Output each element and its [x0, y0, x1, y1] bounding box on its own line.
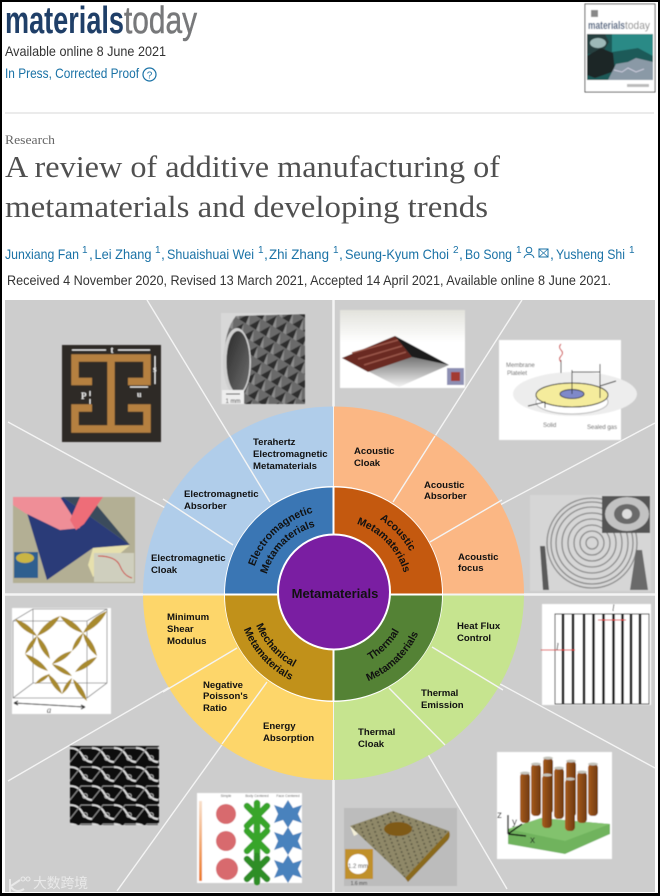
image: electromagnetic cloak	[13, 497, 135, 583]
image: split ring resonator: s	[153, 364, 157, 374]
authors: 1	[82, 245, 88, 256]
image: lattice unit cell: a	[47, 705, 52, 715]
labels: thermal branches: Cloak	[358, 739, 385, 750]
journal cover thumbnail: today	[625, 20, 650, 32]
authors: ,	[550, 246, 554, 262]
labels: mechanical branches: Energy	[263, 721, 296, 732]
image: split ring resonator	[62, 345, 161, 442]
image: black auxetic lattice	[70, 746, 159, 825]
ring label: electromagnetic: Metamaterials	[260, 522, 314, 574]
authors: ,	[339, 246, 343, 262]
image: coloured unit cell grid: Simple	[221, 794, 231, 798]
authors: 1	[516, 245, 522, 256]
image: thermal cloak plate: 1.2 mm	[348, 864, 368, 870]
authors: Seung-Kyum Choi	[345, 246, 449, 262]
middle quadrant: acoustic	[334, 488, 442, 594]
image: thermal cloak plate: 1.6 mm	[351, 881, 367, 887]
authors: Zhi Zhang	[269, 246, 329, 262]
center label: Metamaterials	[292, 586, 378, 601]
labels: electromagnetic branches: Electromagnetic	[151, 553, 226, 564]
image: thermal cloak plate	[344, 808, 457, 887]
image: split ring resonator: t	[110, 345, 114, 355]
article history: Received 4 November 2020, Revised 13 March 2021, Accepted 14 April 2021, Available online 8 June 2021.	[7, 272, 611, 288]
ring label: electromagnetic: Electromagnetic	[248, 507, 312, 566]
labels: mechanical branches: Minimum	[167, 612, 209, 623]
image: copper pillars: y	[512, 817, 517, 828]
authors: ,	[161, 246, 165, 262]
publication date: Available online 8 June 2021	[5, 43, 166, 59]
authors: ,	[459, 246, 463, 262]
authors	[5, 245, 635, 262]
image: spiked cylinder	[221, 313, 305, 405]
spoke lines	[5, 300, 655, 892]
ring label: mechanical: Metamaterials	[244, 626, 292, 680]
labels: mechanical branches: Ratio	[203, 703, 227, 714]
quadrant: mechanical outer	[143, 596, 333, 780]
labels: mechanical branches: Modulus	[167, 636, 206, 647]
image: membrane absorber	[499, 340, 637, 440]
labels: acoustic branches	[354, 446, 499, 574]
labels: thermal branches: Emission	[421, 700, 464, 711]
labels: acoustic branches: Acoustic	[458, 552, 499, 563]
image: coloured unit cell grid: Face Centered	[276, 794, 300, 798]
in press status: In Press, Corrected Proof	[5, 65, 139, 81]
authors: ,	[89, 246, 93, 262]
labels: electromagnetic branches	[151, 437, 328, 576]
image: membrane absorber: Membrane	[506, 363, 535, 369]
image: stripe grating: l	[612, 603, 615, 613]
authors: 1	[155, 245, 161, 256]
authors: Bo Song	[465, 246, 512, 262]
authors: Junxiang Fan	[5, 246, 79, 262]
authors: Yusheng Shi	[556, 246, 625, 262]
ring label: acoustic: Metamaterials	[357, 517, 409, 572]
middle quadrant: thermal	[334, 596, 442, 700]
journal logo: materials	[5, 0, 124, 42]
outer ring dividers	[163, 436, 503, 745]
watermark	[10, 875, 88, 892]
image: stripe grating: l	[556, 642, 559, 653]
labels: thermal branches	[358, 621, 501, 750]
labels: acoustic branches: Cloak	[354, 458, 381, 469]
image: split ring resonator: P	[81, 391, 87, 401]
central circle	[278, 534, 390, 650]
labels: mechanical branches	[167, 612, 314, 744]
image: membrane absorber: Sealed gas	[587, 425, 617, 431]
image: coloured unit cell grid: Body Centered	[245, 794, 269, 798]
labels: thermal branches: Thermal	[421, 688, 458, 699]
middle quadrant: electromagnetic	[225, 488, 332, 594]
labels: electromagnetic branches: Cloak	[151, 565, 178, 576]
diagram panel background	[5, 300, 655, 892]
ring label: acoustic: Acoustic	[380, 514, 414, 550]
image: copper pillars: z	[497, 810, 502, 821]
journal cover thumbnail	[585, 4, 655, 92]
labels: electromagnetic branches: Terahertz	[253, 437, 296, 448]
labels: thermal branches: Thermal	[358, 727, 395, 738]
image: concentric rings lens	[530, 495, 651, 591]
authors: 1	[333, 245, 339, 256]
image: spiked cylinder: 1 mm	[226, 399, 241, 405]
quadrant: thermal outer	[334, 596, 524, 780]
ring label: thermal: Metamaterials	[366, 632, 418, 681]
labels: electromagnetic branches: Absorber	[184, 501, 227, 512]
authors: Lei Zhang	[94, 246, 152, 262]
labels: thermal branches: Heat Flux	[457, 621, 501, 632]
labels: mechanical branches: Negative	[203, 680, 243, 691]
article title	[5, 149, 501, 224]
labels: acoustic branches: focus	[458, 563, 484, 574]
ring label: thermal: Thermal	[366, 628, 399, 659]
image: copper pillars: x	[530, 835, 535, 846]
authors: 1	[629, 245, 635, 256]
authors: 1	[258, 245, 264, 256]
authors: Shuaishuai Wei	[167, 246, 254, 262]
quadrant: acoustic outer	[334, 406, 524, 594]
labels: electromagnetic branches: Electromagnetic	[253, 449, 328, 460]
labels: electromagnetic branches: Electromagnetic	[184, 489, 259, 500]
image: stripe grating	[541, 603, 651, 705]
ring label: mechanical: Mechanical	[256, 622, 297, 667]
authors: ,	[264, 246, 268, 262]
image: membrane absorber: Platelet	[507, 371, 527, 377]
image: acoustic cloak	[340, 310, 465, 388]
labels: electromagnetic branches: Metamaterials	[253, 461, 317, 472]
middle ring white outline	[224, 486, 443, 702]
article title: A review of additive manufacturing of	[5, 149, 501, 184]
labels: mechanical branches: Poisson's	[203, 691, 248, 702]
watermark: 大数跨境	[33, 875, 88, 891]
article title: metamaterials and developing trends	[5, 189, 488, 224]
labels: mechanical branches: Absorption	[263, 733, 314, 744]
journal logo: today	[124, 0, 197, 42]
in press status: ?	[147, 70, 153, 82]
labels: thermal branches: Control	[457, 633, 491, 644]
image: coloured unit cell grid	[197, 793, 302, 883]
journal cover thumbnail: materials	[588, 20, 625, 32]
image: lattice unit cell	[12, 608, 111, 715]
circular diagram	[143, 406, 524, 780]
labels: mechanical branches: Shear	[167, 624, 194, 635]
authors: 2	[453, 245, 459, 256]
labels: acoustic branches: Acoustic	[424, 480, 465, 491]
image: membrane absorber: Solid	[543, 423, 556, 429]
image: split ring resonator: u	[137, 390, 142, 399]
labels: acoustic branches: Absorber	[424, 491, 467, 502]
quadrant: electromagnetic outer	[143, 406, 333, 594]
section label: Research	[5, 132, 56, 147]
divider	[5, 112, 654, 114]
labels: acoustic branches: Acoustic	[354, 446, 395, 457]
image: copper pillars	[497, 752, 612, 859]
middle quadrant: mechanical	[225, 596, 332, 700]
